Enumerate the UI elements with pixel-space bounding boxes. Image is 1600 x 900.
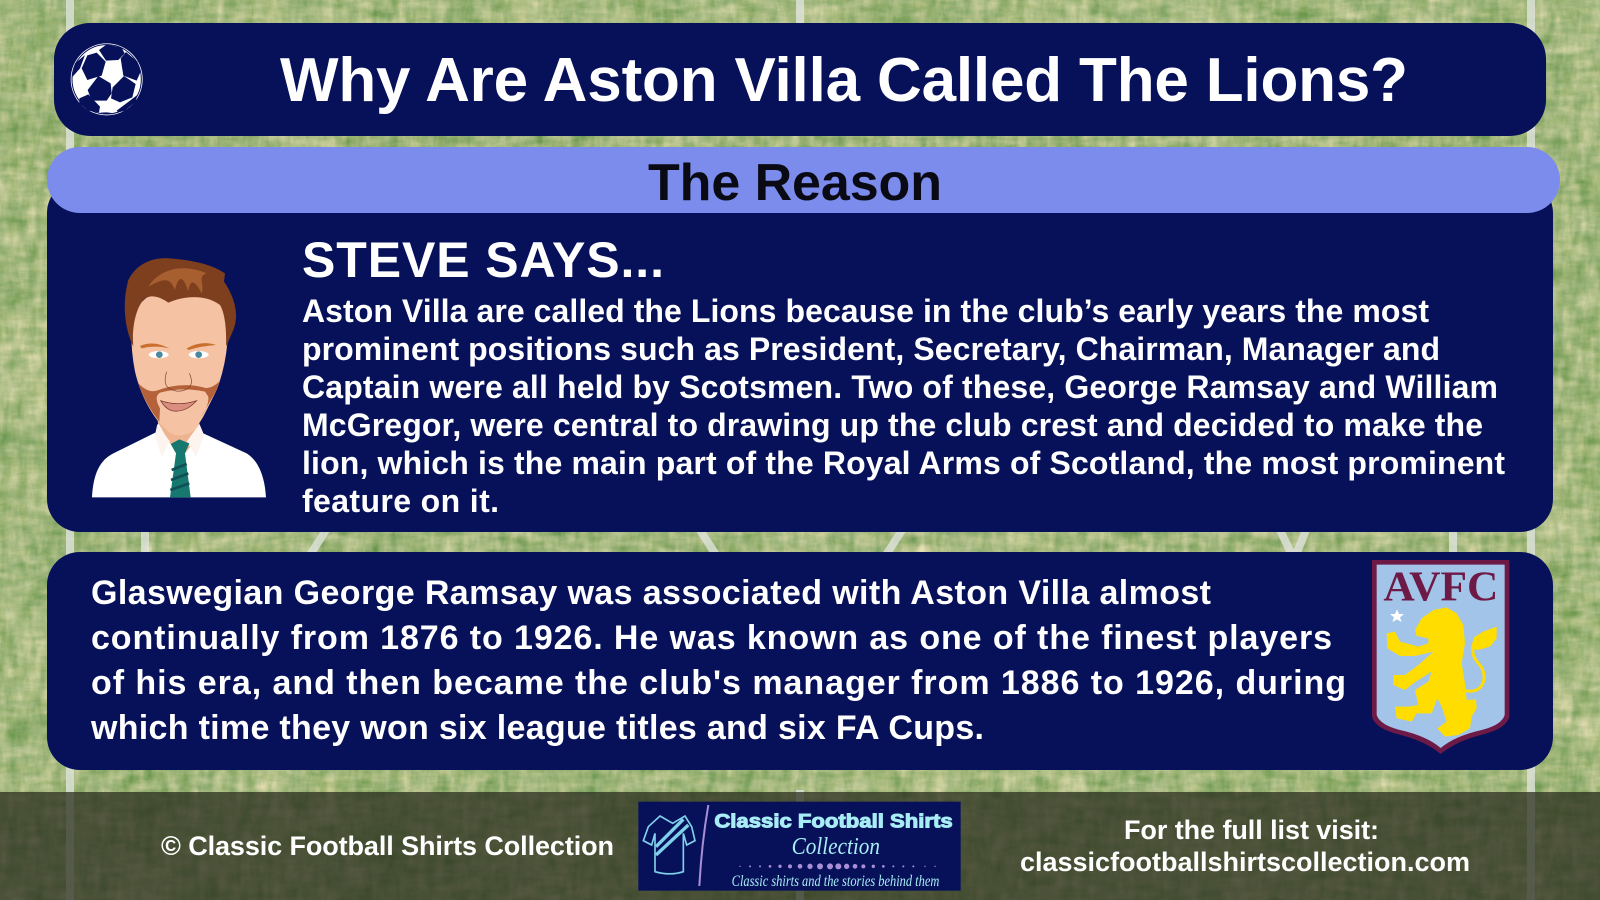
text block: George Ramsay facts: which time they won six league titles and six FA Cups. bbox=[90, 709, 984, 747]
panel: the reason bbox=[47, 147, 1560, 532]
icon: AVFC crest: AVFC bbox=[1383, 564, 1498, 611]
text block: Steve's explanation bbox=[302, 293, 1505, 519]
decorative dots bbox=[739, 863, 936, 869]
logo: Classic Football Shirts Collection bbox=[638, 802, 961, 891]
icon: football bbox=[71, 43, 143, 115]
icon: AVFC crest bbox=[1372, 560, 1509, 754]
heading: STEVE SAYS: STEVE SAYS... bbox=[302, 232, 664, 288]
text block: Steve's explanation: McGregor, were central to drawing up the club crest and decided to make the bbox=[302, 407, 1483, 443]
logo: Classic Football Shirts Collection: Classic shirts and the stories behind them bbox=[732, 873, 939, 890]
text block: George Ramsay facts: Glaswegian George Ramsay was associated with Aston Villa almost bbox=[91, 574, 1211, 612]
heading band: The Reason: The Reason bbox=[648, 154, 942, 212]
logo: Classic Football Shirts Collection: Collection bbox=[792, 834, 880, 860]
text block: Steve's explanation: Captain were all held by Scotsmen. Two of these, George Ramsay and William bbox=[302, 369, 1498, 405]
title bar bbox=[54, 23, 1546, 136]
footer: website call to action bbox=[1020, 815, 1470, 877]
panel: George Ramsay bbox=[47, 552, 1553, 770]
footer copyright: © Classic Football Shirts Collection bbox=[161, 831, 614, 861]
text block: Steve's explanation: prominent positions such as President, Secretary, Chairman, Manager and bbox=[302, 331, 1440, 367]
title text: Why Are Aston Villa Called The Lions? bbox=[280, 46, 1408, 115]
text block: Steve's explanation: feature on it. bbox=[302, 483, 499, 519]
footer: website call to action: classicfootballshirtscollection.com bbox=[1020, 847, 1470, 877]
text block: George Ramsay facts: continually from 1876 to 1926. He was known as one of the finest players bbox=[91, 619, 1332, 657]
text block: George Ramsay facts: of his era, and then became the club's manager from 1886 to 1926, during bbox=[91, 664, 1346, 702]
text block: Steve's explanation: Aston Villa are called the Lions because in the club’s early years the most bbox=[302, 293, 1429, 329]
footer: website call to action: For the full list visit: bbox=[1124, 815, 1379, 845]
footer band bbox=[0, 792, 1600, 900]
heading band: The Reason bbox=[47, 147, 1560, 213]
portrait: Steve caricature bbox=[92, 258, 266, 497]
text block: Steve's explanation: lion, which is the main part of the Royal Arms of Scotland, the most prominent bbox=[302, 445, 1505, 481]
text block: George Ramsay facts bbox=[90, 574, 1346, 747]
icon: shirt bbox=[643, 816, 695, 874]
logo: Classic Football Shirts Collection: Classic Football Shirts bbox=[714, 812, 953, 833]
